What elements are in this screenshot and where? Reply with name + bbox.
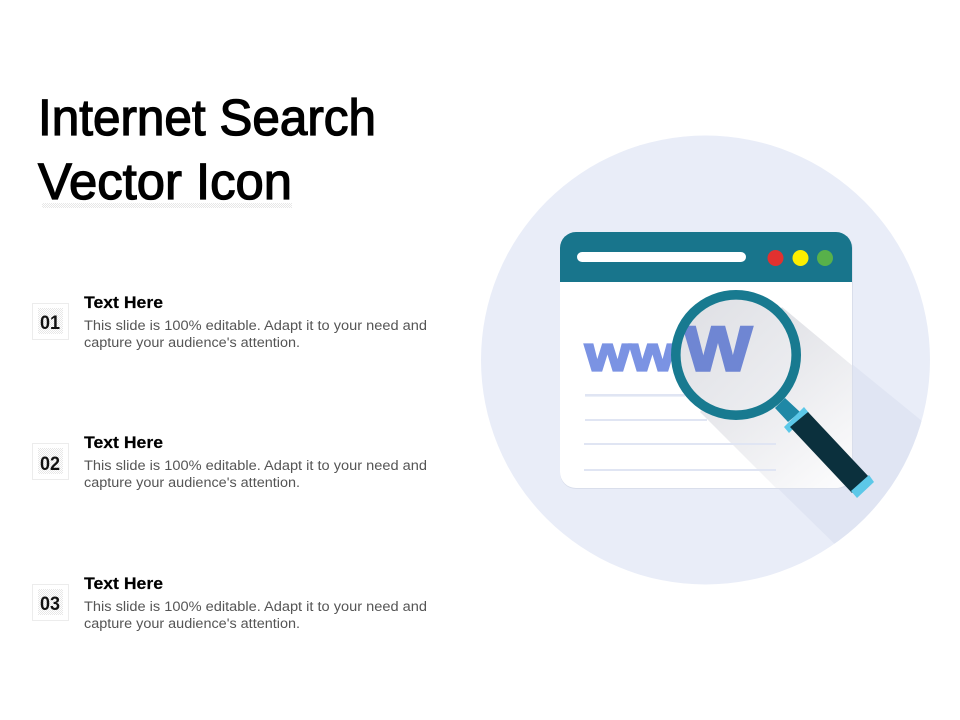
text block 03: This slide is 100% editable. Adapt it to your need and <box>84 599 427 614</box>
text block 02: capture your audience's attention. <box>84 475 300 490</box>
number badge 02 <box>32 444 68 480</box>
end cap <box>851 475 874 498</box>
text block 02: This slide is 100% editable. Adapt it to your need and <box>84 458 427 473</box>
item 01 <box>32 293 427 350</box>
handle neck <box>775 398 800 422</box>
heading 02: Text Here <box>84 433 163 452</box>
title: Vector Icon <box>38 153 292 210</box>
lens <box>680 299 792 411</box>
text block 03: capture your audience's attention. <box>84 616 300 631</box>
number badge 03: 03 <box>40 593 60 615</box>
magnifying glass <box>676 295 874 498</box>
shadow on window <box>700 307 860 495</box>
browser title bar <box>560 232 852 282</box>
title: Internet Search <box>38 89 376 146</box>
text block 01 <box>84 318 427 350</box>
lens ring <box>676 295 796 415</box>
heading 01: Text Here <box>84 293 163 312</box>
number badge 01: 01 <box>40 312 60 334</box>
handle grip <box>790 412 869 493</box>
background circle <box>481 136 930 584</box>
window buttons <box>768 250 833 266</box>
www text: ww <box>584 328 676 382</box>
icon: internet search illustration <box>481 136 930 584</box>
number badge 02: 02 <box>40 453 60 475</box>
item 03 <box>32 574 427 631</box>
text block 02 <box>84 458 427 490</box>
long shadow on circle <box>779 366 922 544</box>
heading 03: Text Here <box>84 574 163 593</box>
title <box>38 89 376 210</box>
text block 03 <box>84 599 427 631</box>
text lines <box>584 394 776 471</box>
number badge 03 <box>32 584 68 620</box>
magnified W: W <box>684 314 753 384</box>
text block 01: capture your audience's attention. <box>84 335 300 350</box>
address bar <box>577 252 746 262</box>
number badge 01 <box>32 304 68 340</box>
text block 01: This slide is 100% editable. Adapt it to your need and <box>84 318 427 333</box>
item 02 <box>32 433 427 490</box>
browser window <box>560 232 853 489</box>
collar <box>784 407 809 433</box>
